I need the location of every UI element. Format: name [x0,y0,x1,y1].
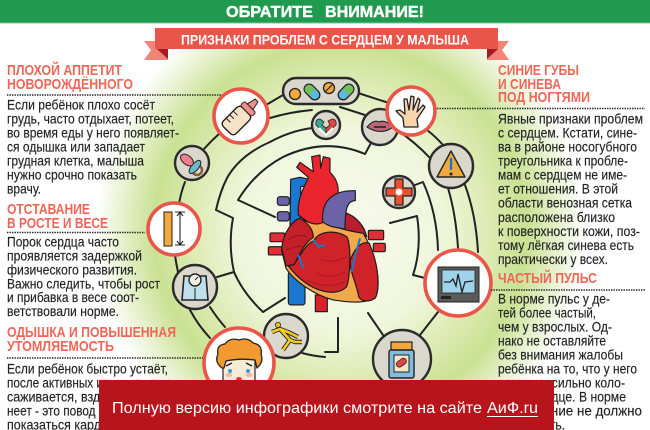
icon: lips [362,109,398,145]
text block [7,234,161,319]
text block: нако не оставляйте [498,332,606,348]
text block: тится сердце. В норме [498,388,626,404]
heading: ОДЫШКА И ПОВЫШЕННАЯ [7,324,176,341]
heading: И СИНЕВА [498,76,561,93]
heading [7,324,176,355]
text block [7,96,179,196]
text block: ет отношения. В этой [498,180,618,196]
text block: слишком сильно коло- [498,374,625,390]
ribbon heading: ПРИЗНАКИ ПРОБЛЕМ С СЕРДЦЕМ У МАЛЫША [181,32,469,48]
heart illustration [268,155,385,312]
top banner: ВНИМАНИЕ! [325,4,424,21]
panel: fast pulse [491,269,645,430]
text block: Важно следить, чтобы рост [7,276,161,292]
icon: medical cross [383,176,415,208]
text block [498,290,642,430]
bottom banner link: Полную версию инфографики смотрите на сайте [112,400,482,417]
text block: и прибавка в весе соот- [7,289,139,305]
text block: физического развития. [7,262,137,278]
text block: мам с сердцем не име- [498,166,627,182]
top banner: ОБРАТИТЕ [226,4,313,21]
text block: грудь, часто отдыхает, потеет, [7,110,174,126]
icon: medicine jar [373,330,431,388]
panel: blue lips [437,62,645,267]
text block: тей более частый, [498,304,596,320]
icon: monitor [425,250,491,316]
green glow background [90,48,590,430]
text block: нужно срочно показать [7,166,137,182]
text block: проявляется задержкой [7,248,142,264]
text block [7,360,174,430]
heading: УТОМЛЯЕМОСТЬ [7,338,114,355]
text block: В норме пульс у де- [498,290,610,306]
heading: СИНИЕ ГУБЫ [498,62,579,79]
text block: практически у всех. [498,251,608,267]
icon: hand [387,87,435,135]
text block: ветствовали норме. [7,303,119,319]
icon: warning [429,144,473,188]
text block: грудная клетка, малыша [7,152,144,168]
panel: poor appetite [7,61,222,196]
heading: ЧАСТЫЙ ПУЛЬС [498,269,597,287]
top banner [0,0,650,24]
text block: это явление не должно [498,402,642,418]
panel: shortness of breath [7,324,203,430]
heading [7,61,133,93]
text block: во время еды у него появляет- [7,124,179,140]
text block: Если ребёнок плохо сосёт [7,96,156,112]
heading: ПОД НОГТЯМИ [498,89,590,106]
icon: runner [264,314,308,358]
text block: врачу. [7,180,41,196]
heading: В РОСТЕ И ВЕСЕ [7,215,108,232]
heading [7,201,108,232]
heading: ОТСТАВАНИЕ [7,201,90,218]
bottom banner link: АиФ.ru [487,400,538,417]
heading: НОВОРОЖДЁННОГО [7,76,133,93]
text block: ся одышка или западает [7,138,146,154]
icon: pills capsule [283,78,359,104]
heading: ПЛОХОЙ АППЕТИТ [7,61,122,79]
text block: треугольника к пробле- [498,152,628,168]
ribbon heading [144,28,509,60]
icon: pacifier [175,146,209,180]
text block: чем у взрослых. Од- [498,318,612,334]
text block: области венозная сетка [498,194,632,210]
icon: bottle [214,89,268,143]
heading [498,62,590,106]
icon: ruler [148,203,200,255]
ring connector lines [175,93,478,357]
text block: Если ребёнок быстро устаёт, [7,360,168,376]
text block: Порок сердца часто [7,234,119,250]
text block: после активных игр часто при- [7,374,174,390]
text block: саживается, вздыхает, блед- [7,388,172,404]
text block: без внимания жалобы [498,346,623,362]
icon: broken heart [312,111,340,139]
text block: расположена близко [498,209,615,225]
panel: growth delay [7,201,161,319]
icon: scale [173,265,217,309]
text block [498,110,643,267]
icon: crying child [204,328,274,398]
text block: неет - это повод срочно [7,402,137,418]
bottom banner link [99,380,554,430]
